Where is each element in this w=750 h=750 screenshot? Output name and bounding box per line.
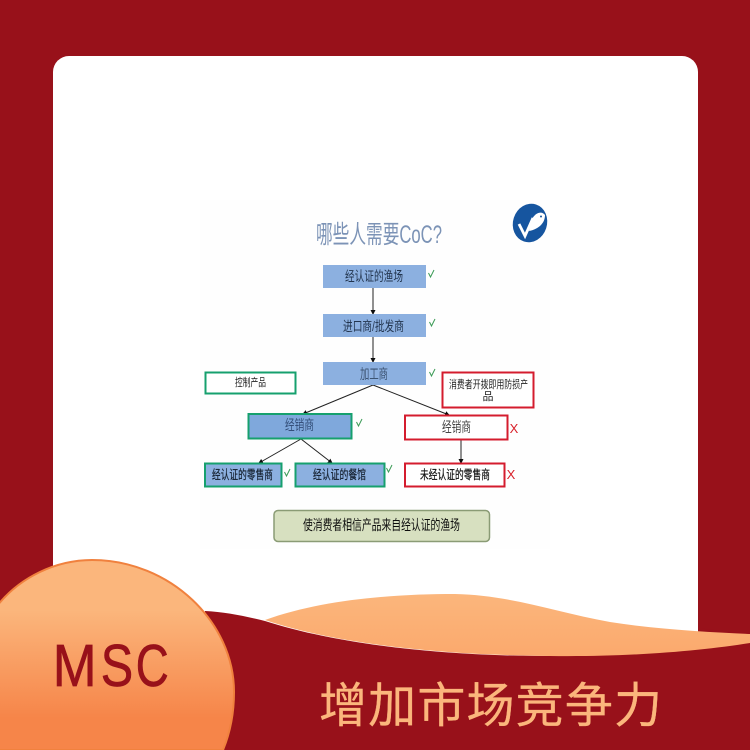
icon: MSC fish logo — [508, 199, 552, 247]
note: consumer opened product: 消费者开拨即用防损产 — [449, 377, 528, 391]
node: certified restaurant: 经认证的餐馆 — [313, 467, 366, 482]
node: certified distributor: 经销商 — [285, 417, 314, 433]
badge: orange ellipse — [0, 560, 234, 750]
node: certified restaurant — [296, 464, 384, 486]
node: processor — [323, 362, 426, 385]
callout: consumer trust — [274, 510, 490, 542]
flow arrow: distributor to certified retailer — [259, 439, 301, 463]
cross marks — [507, 421, 519, 482]
flow arrow: distributor to certified restaurant — [301, 439, 332, 463]
note: consumer opened product: 品 — [482, 390, 494, 403]
callout: consumer trust: 使消费者相信产品来自经认证的渔场 — [303, 517, 460, 533]
wave: dark red band — [205, 611, 750, 750]
node: certified fishery — [323, 265, 426, 288]
title: increase market competitiveness: 增加市场竞争力 — [319, 680, 662, 733]
diagram backdrop — [200, 200, 550, 549]
node: certified fishery: 经认证的渔场 — [345, 269, 403, 284]
flow arrow: importer to processor — [372, 337, 374, 362]
note: control product — [206, 372, 296, 394]
badge label: MSC: S — [101, 633, 133, 699]
node: certified distributor — [248, 414, 352, 438]
node: uncertified retailer — [405, 464, 504, 486]
node: importer wholesaler — [323, 314, 426, 337]
cross marks: X — [510, 421, 519, 436]
node: uncertified distributor: 经销商 — [442, 419, 471, 435]
corner: card lower right — [698, 560, 750, 634]
note: control product: 控制产品 — [235, 375, 266, 389]
badge label: MSC — [53, 633, 169, 699]
panel: white card — [53, 56, 698, 696]
node: certified retailer: 经认证的零售商 — [212, 467, 273, 482]
cross marks: X — [507, 467, 516, 482]
flow arrow: processor to certified distributor — [303, 385, 373, 414]
badge label: MSC: M — [53, 633, 97, 699]
badge label: MSC: C — [136, 633, 169, 699]
node: certified retailer — [205, 464, 282, 486]
check marks — [284, 270, 435, 476]
flow arrow: fishery to importer — [372, 288, 374, 314]
flow arrow: uncertified distributor to retailer — [460, 440, 462, 463]
node: uncertified distributor — [405, 416, 508, 440]
wave: light orange — [265, 594, 750, 656]
panel: CoC flow diagram — [200, 199, 552, 549]
heading: who needs CoC: 哪些人需要CoC? — [316, 221, 442, 249]
node: uncertified retailer: 未经认证的零售商 — [420, 467, 490, 482]
flow arrow: processor to uncertified distributor — [373, 385, 449, 415]
node: importer wholesaler: 进口商/批发商 — [343, 319, 404, 334]
note: consumer opened product — [442, 372, 534, 408]
node: processor: 加工商 — [360, 366, 388, 382]
